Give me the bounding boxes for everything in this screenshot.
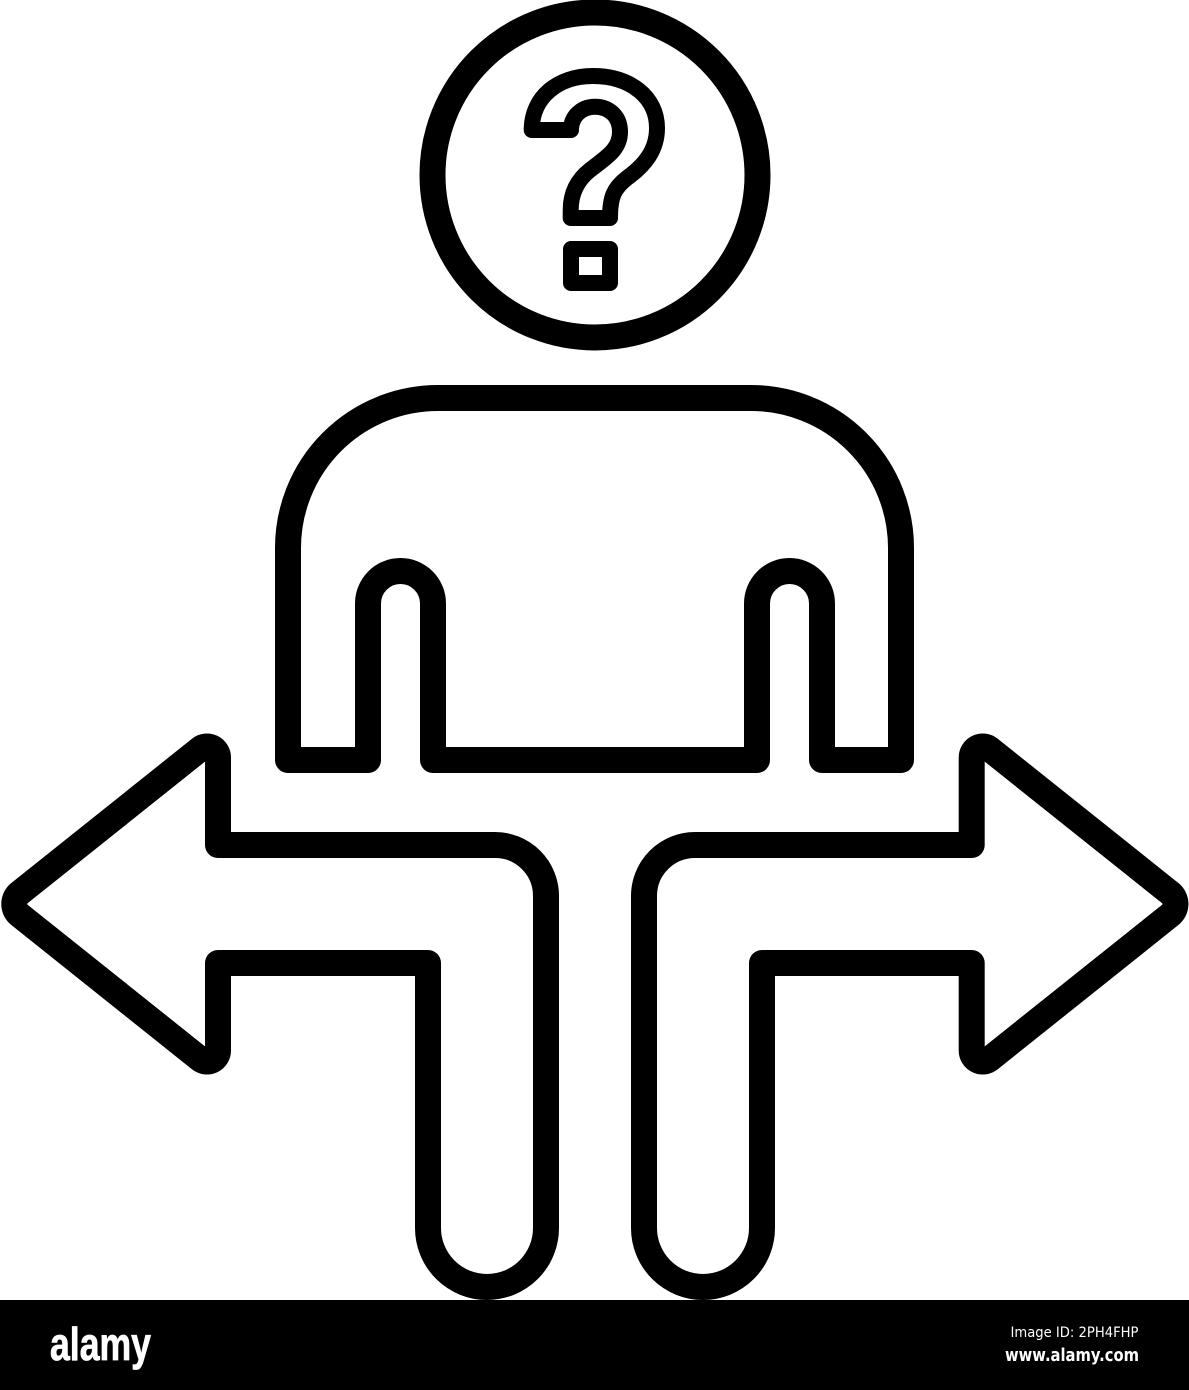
footer logo: alamy: alamy xyxy=(50,1318,151,1370)
footer bar xyxy=(0,1300,1189,1390)
arrow: left xyxy=(14,746,546,1287)
footer website: www.alamy.com xyxy=(1005,1346,1139,1366)
icon: head circle xyxy=(432,12,758,338)
footer image id: Image ID: 2PH4FHP xyxy=(1010,1325,1139,1341)
arrow: right xyxy=(644,746,1175,1287)
question mark hook xyxy=(532,76,657,218)
icon: person body xyxy=(288,398,901,760)
question mark dot xyxy=(571,249,610,283)
icon: question mark xyxy=(532,76,657,283)
